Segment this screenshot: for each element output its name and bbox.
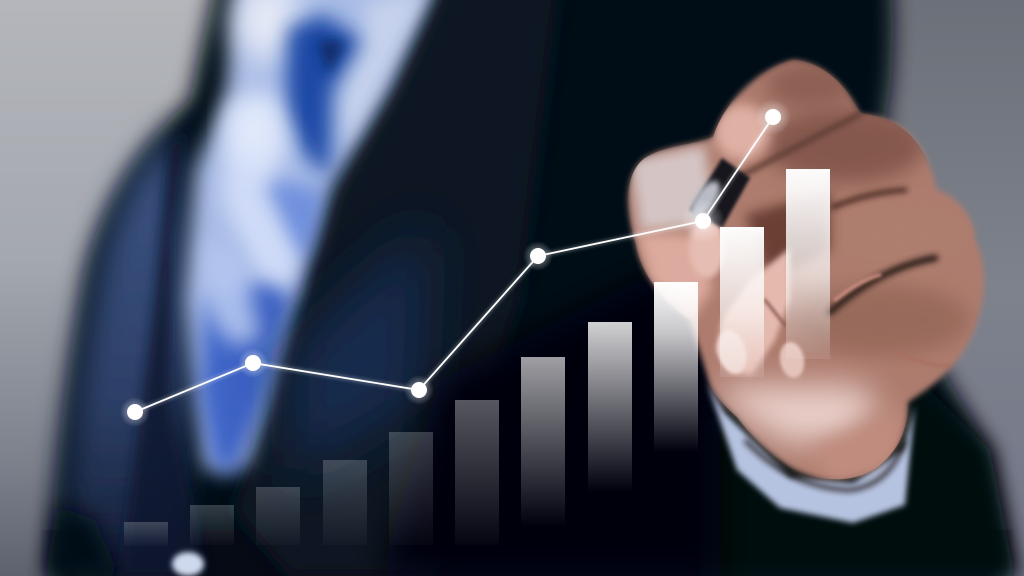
bar 1 <box>124 522 168 546</box>
bar 2 <box>190 505 234 545</box>
data point 4 <box>523 241 553 271</box>
bar 8 <box>588 322 632 492</box>
tie lower blade <box>200 270 300 478</box>
lower pale stripe <box>205 240 262 345</box>
bar 5 <box>389 432 433 545</box>
index fingertip glow <box>714 104 770 160</box>
knuckle browns <box>765 107 925 183</box>
shadow between palm and cuff <box>745 440 905 490</box>
data point 1 <box>120 397 150 427</box>
bar 4 <box>323 460 367 545</box>
tie upper dark band <box>285 14 362 178</box>
bar 11 <box>786 169 830 359</box>
hand holding pen <box>628 60 984 490</box>
light tie stripe <box>222 95 300 300</box>
solid base along the bottom edge <box>40 530 1015 576</box>
dark recess between fingers <box>745 190 830 280</box>
bar 7 <box>521 357 565 527</box>
tie mid blue band <box>262 178 325 270</box>
finger pad under pen <box>689 218 725 278</box>
data point 5 <box>681 199 725 243</box>
bar 9 <box>654 282 698 452</box>
lower palm <box>715 385 880 445</box>
sleeve on the right <box>700 380 1015 576</box>
jacket button glint <box>172 552 204 576</box>
bottom-left jacket shadow <box>45 505 120 576</box>
thumb <box>630 145 712 232</box>
shirt cuff <box>707 383 915 523</box>
line chart: growth trend line <box>120 99 791 427</box>
pen <box>684 158 750 228</box>
fingernail <box>716 330 748 376</box>
jacket lapels <box>120 0 720 576</box>
bar 6 <box>455 400 499 545</box>
bar 10 <box>720 227 764 377</box>
data point 6 <box>755 99 791 135</box>
foreground finger <box>716 248 790 375</box>
finger creases <box>740 110 947 366</box>
left jacket panel in blue <box>60 130 190 576</box>
shirt collar highlight <box>234 0 302 60</box>
data point 3 <box>404 375 434 405</box>
dress shirt <box>185 0 445 470</box>
bar chart: 11 rising translucent bars <box>124 169 830 546</box>
data point 2 <box>238 348 268 378</box>
necktie <box>200 14 362 478</box>
bar 3 <box>256 487 300 545</box>
